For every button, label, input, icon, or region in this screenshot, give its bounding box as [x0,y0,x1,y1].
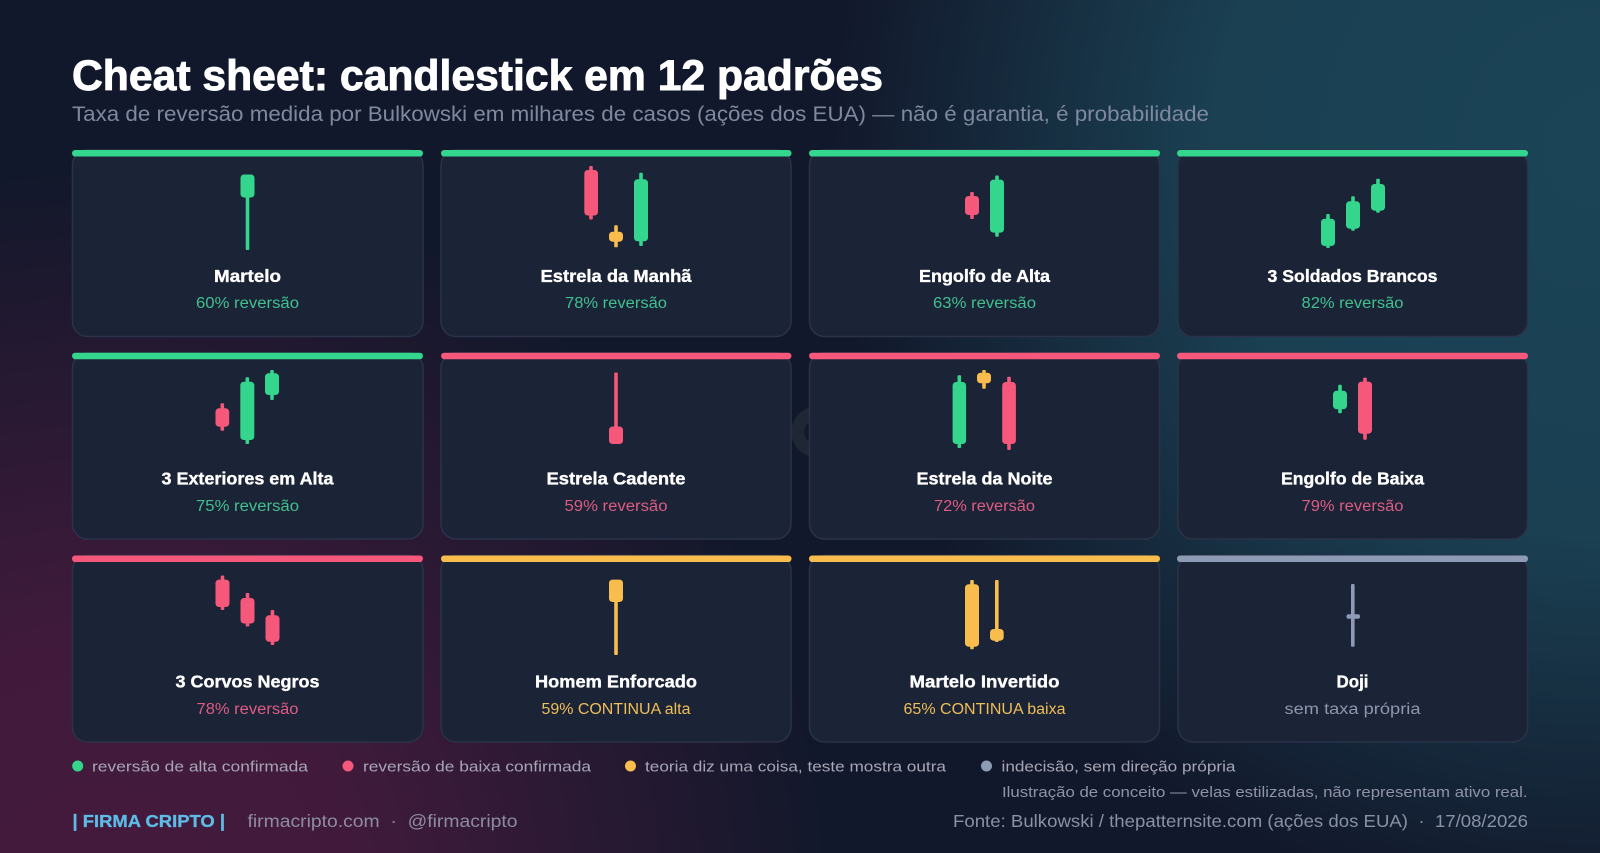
panel: 3 Soldados Brancos [1177,150,1528,336]
icon: estrela da manhã candles [584,166,648,247]
icon: estrela cadente candle [609,372,623,444]
icon: homem enforcado candle [609,580,623,655]
panel: Homem Enforcado: 59% CONTINUA alta [542,701,691,718]
panel: 3 Soldados Brancos: 3 Soldados Brancos [1268,266,1438,286]
panel: Doji [1177,556,1528,742]
panel: Estrela Cadente: Estrela Cadente [546,468,686,488]
panel: Martelo Invertido: 65% CONTINUA baixa [904,701,1066,718]
panel: Martelo: Martelo [214,266,281,286]
panel: Estrela da Manhã: Estrela da Manhã [540,266,692,286]
panel: Martelo Invertido: Martelo Invertido [910,672,1060,692]
icon: martelo candle [240,174,254,250]
panel: Engolfo de Baixa [1177,353,1528,539]
footer brand: | FIRMA CRIPTO | [72,811,225,831]
panel: Estrela da Noite [809,353,1160,539]
icon: 3 soldados candles [1321,179,1385,248]
panel: Homem Enforcado [441,556,792,742]
panel: Engolfo de Alta: 63% reversão [933,295,1036,312]
footer links: firmacripto.com · @firmacripto [248,811,518,831]
legend [72,758,1236,776]
panel: Martelo: 60% reversão [196,295,299,312]
icon: 3 exteriores candles [216,370,279,444]
panel: Estrela da Manhã: 78% reversão [565,295,667,312]
panel: 3 Corvos Negros: 78% reversão [196,701,298,718]
panel: Homem Enforcado: Homem Enforcado [535,672,697,692]
panel: 3 Exteriores em Alta [72,353,423,539]
panel: Doji: sem taxa própria [1284,701,1421,718]
panel: 3 Corvos Negros [72,556,423,742]
disclaimer: Ilustração de conceito — velas estilizadas, não representam ativo real. [1002,785,1528,801]
panel: Estrela da Manhã [441,150,792,336]
legend: reversão de baixa confirmada [363,758,592,776]
panel: Estrela da Noite: 72% reversão [934,498,1035,515]
icon: engolfo de alta candles [965,176,1004,237]
panel: Doji: Doji [1336,672,1368,692]
panel: Estrela da Noite: Estrela da Noite [916,468,1053,488]
icon: 3 corvos candles [216,576,280,645]
subtitle: Taxa de reversão medida por Bulkowski em milhares de casos (ações dos EUA) — não é garantia, é probabilidade [72,103,1209,126]
panel: Martelo [72,150,423,336]
panel: Engolfo de Alta [809,150,1160,336]
panel: Estrela Cadente [441,353,792,539]
panel: 3 Exteriores em Alta: 75% reversão [196,498,299,515]
panel: 3 Exteriores em Alta: 3 Exteriores em Alta [162,468,334,488]
icon: estrela da noite candles [953,370,1016,450]
icon: engolfo de baixa candles [1333,378,1372,440]
panel: Engolfo de Baixa: Engolfo de Baixa [1281,468,1424,488]
icon: martelo invertido candles [965,580,1004,649]
legend: indecisão, sem direção própria [1002,758,1236,776]
legend: reversão de alta confirmada [92,758,309,776]
title: Cheat sheet: candlestick em 12 padrões [72,52,883,100]
footer source: Fonte: Bulkowski / thepatternsite.com (ações dos EUA) · 17/08/2026 [953,811,1528,831]
panel: Martelo Invertido [809,556,1160,742]
icon: doji candle [1346,584,1360,647]
panel: Engolfo de Alta: Engolfo de Alta [919,266,1050,286]
legend: teoria diz uma coisa, teste mostra outra [645,758,947,776]
panel: 3 Soldados Brancos: 82% reversão [1302,295,1404,312]
panel: Engolfo de Baixa: 79% reversão [1302,498,1404,515]
panel: Estrela Cadente: 59% reversão [564,498,668,515]
panel: 3 Corvos Negros: 3 Corvos Negros [176,672,320,692]
